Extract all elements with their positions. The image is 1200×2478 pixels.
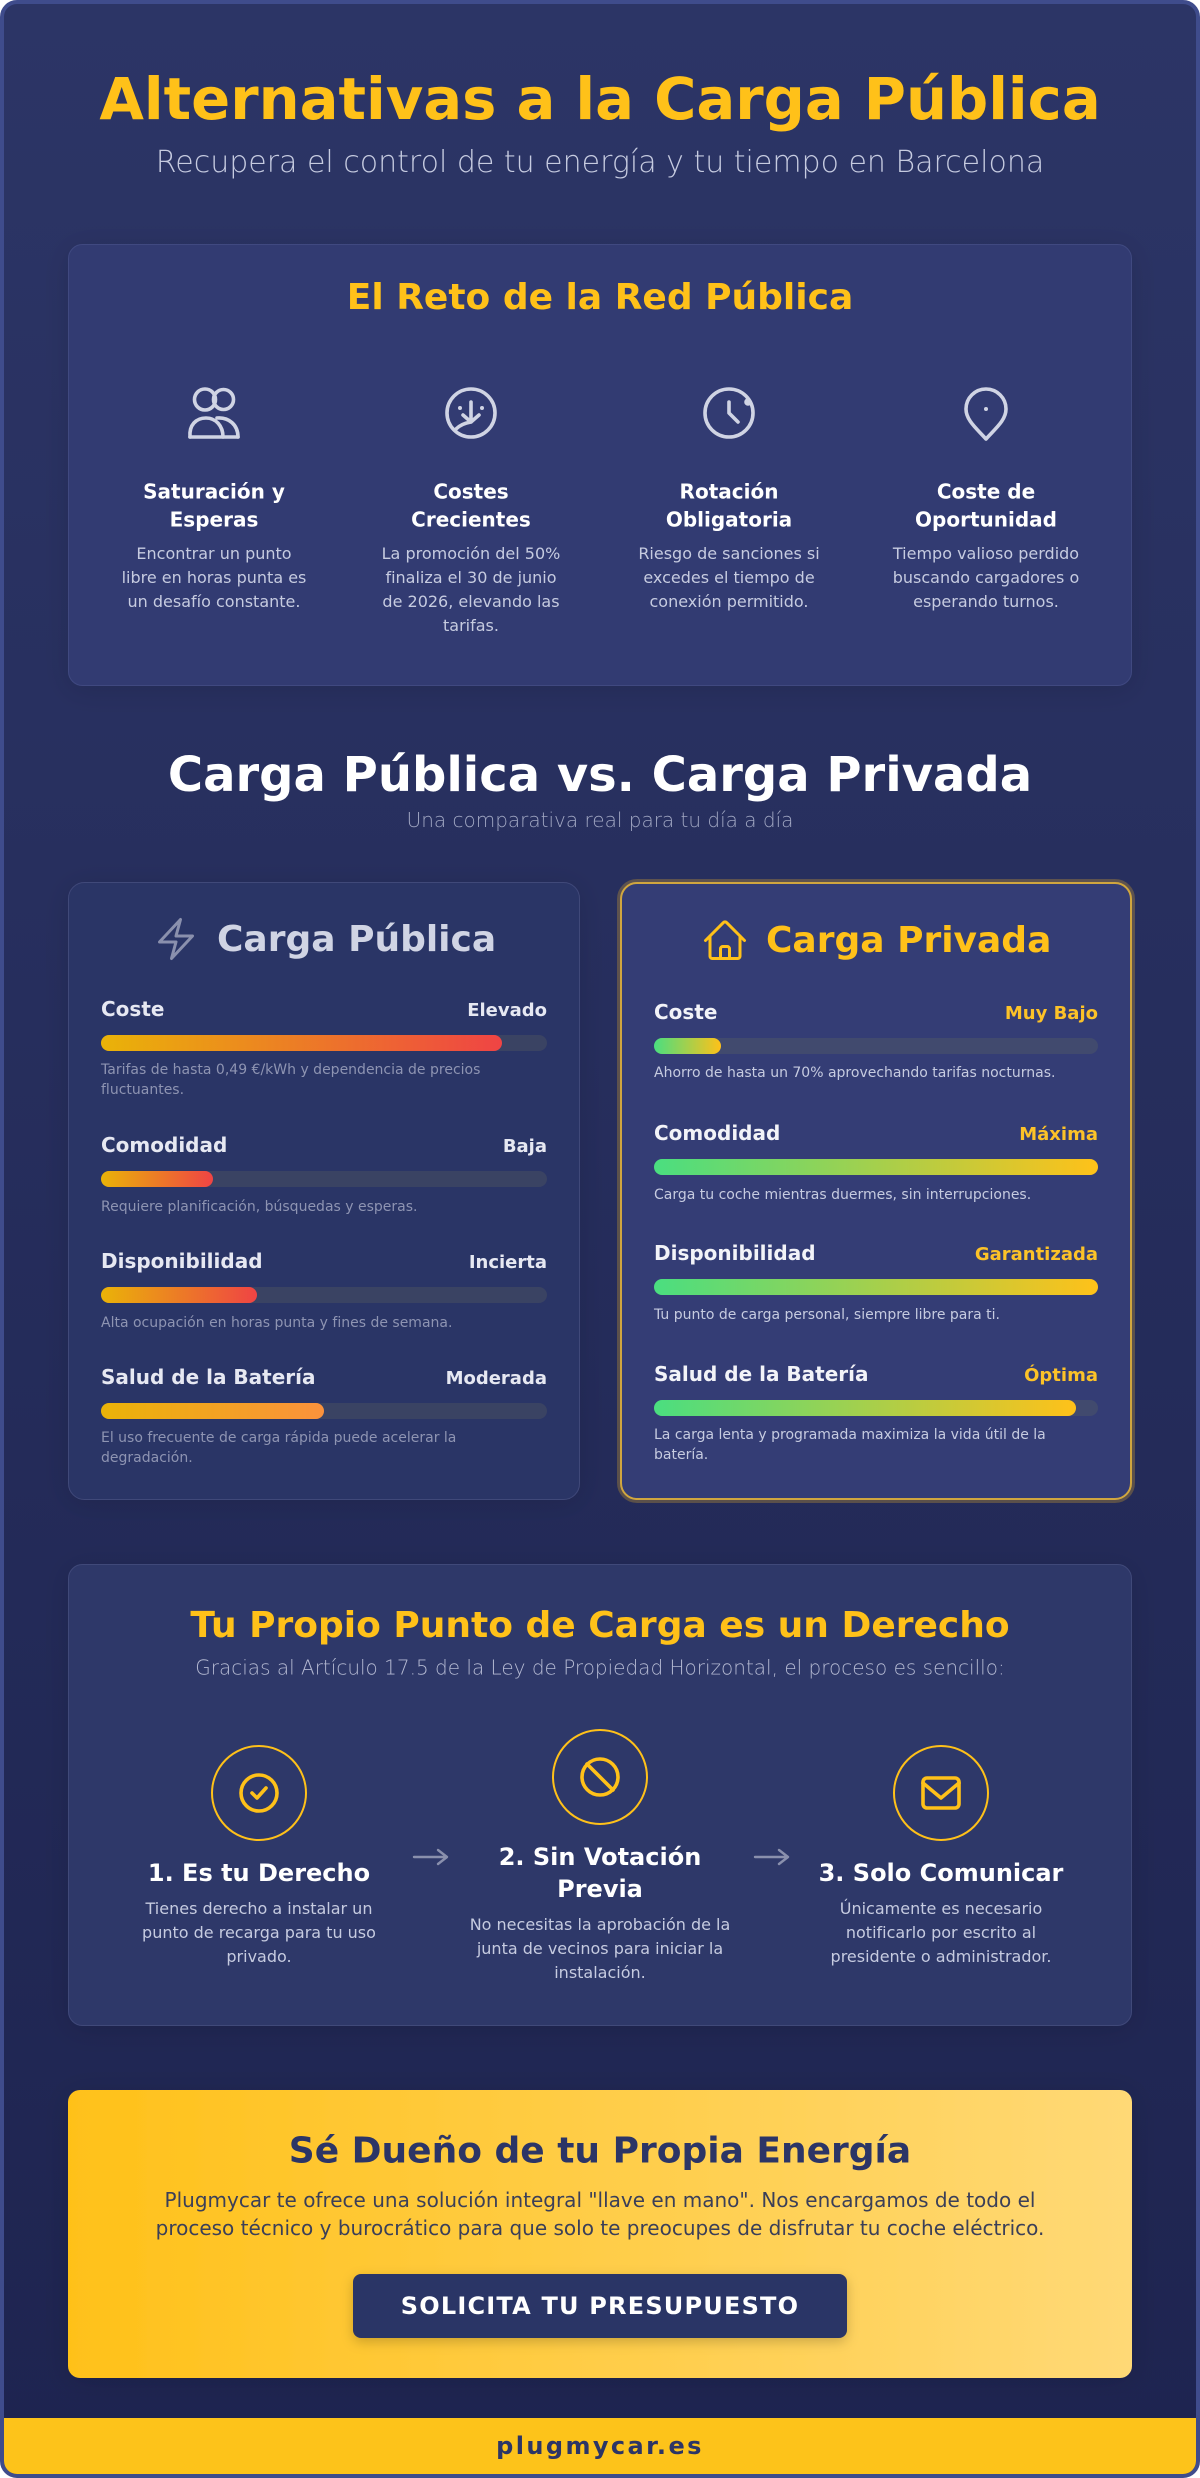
- item: coste de oportunidad: [892, 389, 1079, 611]
- item: saturación: Encontrar un punto: [136, 544, 292, 563]
- metric: salud de la batería: batería.: [654, 1447, 708, 1463]
- item: coste de oportunidad: Coste de: [937, 480, 1035, 504]
- subtitle: Recupera el control de tu energía y tu tiempo en Barcelona: [156, 145, 1044, 180]
- metric: salud de la batería: [654, 1362, 1098, 1463]
- metric: comodidad: Baja: [503, 1136, 547, 1157]
- cta text: proceso técnico y burocrático para que solo te preocupes de disfrutar tu coche eléctrico.: [156, 2216, 1044, 2240]
- panel: carga pública: [68, 882, 580, 1500]
- panel heading: Tu Propio Punto de Carga es un Derecho: [190, 1605, 1010, 1646]
- metric: coste: Elevado: [467, 1000, 547, 1021]
- metric: salud de la batería: [101, 1365, 547, 1466]
- metric: disponibilidad: [653, 1241, 1098, 1323]
- metric: comodidad: Comodidad: [101, 1133, 227, 1157]
- comparison heading: Carga Pública vs. Carga Privada: [168, 747, 1032, 803]
- metric: salud de la batería: La carga lenta y programada maximiza la vida útil de la: [654, 1427, 1046, 1443]
- metric: salud de la batería: degradación.: [101, 1450, 193, 1466]
- item: saturación: Esperas: [170, 508, 258, 532]
- arrow: [755, 1850, 788, 1864]
- item: rotación: conexión permitido.: [649, 592, 809, 611]
- footer bar: plugmycar.es: [496, 2432, 704, 2460]
- step 2: No necesitas la aprobación de la: [470, 1915, 730, 1934]
- metric: comodidad: Comodidad: [654, 1121, 780, 1145]
- icon: home: [706, 922, 744, 958]
- metric: disponibilidad: [101, 1249, 547, 1331]
- item: coste de oportunidad: Tiempo valioso perdido: [892, 544, 1079, 563]
- icon: mail: [923, 1778, 959, 1808]
- item: rotación: Obligatoria: [666, 508, 792, 532]
- panel: carga privada: [619, 881, 1133, 1501]
- metric: coste: Muy Bajo: [1005, 1003, 1098, 1024]
- metric: salud de la batería: Salud de la Batería: [654, 1362, 869, 1386]
- cta heading: Sé Dueño de tu Propia Energía: [289, 2130, 911, 2172]
- step 2: Previa: [557, 1875, 643, 1903]
- step 1: 1. Es tu Derecho: [148, 1859, 370, 1887]
- footer bar: [0, 2418, 1200, 2478]
- panel: call to action: [68, 2090, 1132, 2378]
- step 2: instalación.: [554, 1963, 646, 1982]
- panel: derecho: [68, 1564, 1132, 2026]
- item: saturación: [122, 389, 306, 611]
- metric: disponibilidad: Tu punto de carga personal, siempre libre para ti.: [653, 1307, 1000, 1323]
- item: costes: [382, 389, 560, 635]
- icon: ban: [582, 1759, 618, 1795]
- step 3: presidente o administrador.: [831, 1947, 1051, 1966]
- metric: coste: [100, 997, 547, 1098]
- item: coste de oportunidad: Oportunidad: [915, 508, 1057, 532]
- icon: map pin: [966, 389, 1006, 439]
- metric: salud de la batería: Moderada: [446, 1368, 547, 1389]
- item: saturación: Saturación y: [143, 480, 285, 504]
- metric: comodidad: Requiere planificación, búsquedas y esperas.: [101, 1199, 417, 1215]
- step 2: [470, 1730, 730, 1982]
- metric: coste: fluctuantes.: [101, 1082, 184, 1098]
- metric: comodidad: [654, 1121, 1098, 1203]
- metric: coste: Coste: [654, 1000, 717, 1024]
- metric: disponibilidad: Disponibilidad: [654, 1241, 816, 1265]
- step 1: Tienes derecho a instalar un: [145, 1899, 372, 1918]
- metric: coste: Tarifas de hasta 0,49 €/kWh y dependencia de precios: [100, 1062, 480, 1078]
- step 1: privado.: [226, 1947, 292, 1966]
- item: costes: finaliza el 30 de junio: [385, 568, 557, 587]
- cta text: [156, 2188, 1044, 2240]
- item: costes: tarifas.: [443, 616, 499, 635]
- item: costes: de 2026, elevando las: [382, 592, 560, 611]
- metric: salud de la batería: Óptima: [1024, 1364, 1098, 1386]
- panel: el reto de la red pública: [68, 244, 1132, 686]
- item: costes: La promoción del 50%: [382, 544, 560, 563]
- metric: comodidad: [101, 1133, 547, 1215]
- icon: clock: [705, 389, 753, 437]
- cta text: Plugmycar te ofrece una solución integral "llave en mano". Nos encargamos de todo el: [165, 2188, 1035, 2212]
- item: coste de oportunidad: esperando turnos.: [913, 592, 1059, 611]
- card heading: Carga Pública: [217, 919, 496, 960]
- cta button: [353, 2274, 847, 2338]
- item: rotación: [638, 389, 820, 611]
- item: coste de oportunidad: buscando cargadores o: [893, 568, 1079, 587]
- metric: salud de la batería: El uso frecuente de carga rápida puede acelerar la: [101, 1430, 456, 1446]
- step 2: 2. Sin Votación: [499, 1843, 701, 1871]
- icon: bolt: [160, 920, 192, 958]
- metric: disponibilidad: Alta ocupación en horas punta y fines de semana.: [101, 1315, 452, 1331]
- step 3: 3. Solo Comunicar: [819, 1859, 1064, 1887]
- step 3: [819, 1746, 1064, 1966]
- step 2: junta de vecinos para iniciar la: [476, 1939, 723, 1958]
- item: rotación: excedes el tiempo de: [643, 568, 815, 587]
- step 3: notificarlo por escrito al: [846, 1923, 1036, 1942]
- panel heading: El Reto de la Red Pública: [347, 277, 853, 318]
- card heading: Carga Privada: [766, 920, 1051, 961]
- item: costes: Crecientes: [411, 508, 531, 532]
- title: Alternativas a la Carga Pública: [99, 66, 1101, 133]
- metric: coste: Coste: [101, 997, 164, 1021]
- icon: users: [190, 389, 238, 437]
- metric: disponibilidad: Incierta: [469, 1252, 547, 1273]
- arrow: [414, 1850, 447, 1864]
- metric: comodidad: Carga tu coche mientras duermes, sin interrupciones.: [654, 1187, 1031, 1203]
- metric: comodidad: Máxima: [1019, 1124, 1098, 1145]
- metric: coste: [654, 1000, 1098, 1081]
- metric: disponibilidad: Garantizada: [975, 1244, 1098, 1265]
- step 1: punto de recarga para tu uso: [142, 1923, 376, 1942]
- item: rotación: Rotación: [680, 480, 778, 504]
- step 3: Únicamente es necesario: [840, 1899, 1042, 1918]
- metric: coste: Ahorro de hasta un 70% aprovechando tarifas nocturnas.: [654, 1065, 1055, 1081]
- panel subtitle: Gracias al Artículo 17.5 de la Ley de Propiedad Horizontal, el proceso es sencillo:: [195, 1656, 1005, 1680]
- item: saturación: un desafío constante.: [128, 592, 300, 611]
- step 1: [142, 1746, 376, 1966]
- icon: check circle: [241, 1775, 277, 1811]
- comparison subtitle: Una comparativa real para tu día a día: [407, 808, 793, 832]
- item: saturación: libre en horas punta es: [122, 568, 306, 587]
- metric: disponibilidad: Disponibilidad: [101, 1249, 263, 1273]
- cta button: SOLICITA TU PRESUPUESTO: [401, 2292, 799, 2320]
- item: rotación: Riesgo de sanciones si: [638, 544, 820, 563]
- icon: gauge with falling arrow: [447, 389, 495, 437]
- item: costes: Costes: [433, 480, 509, 504]
- metric: salud de la batería: Salud de la Batería: [101, 1365, 316, 1389]
